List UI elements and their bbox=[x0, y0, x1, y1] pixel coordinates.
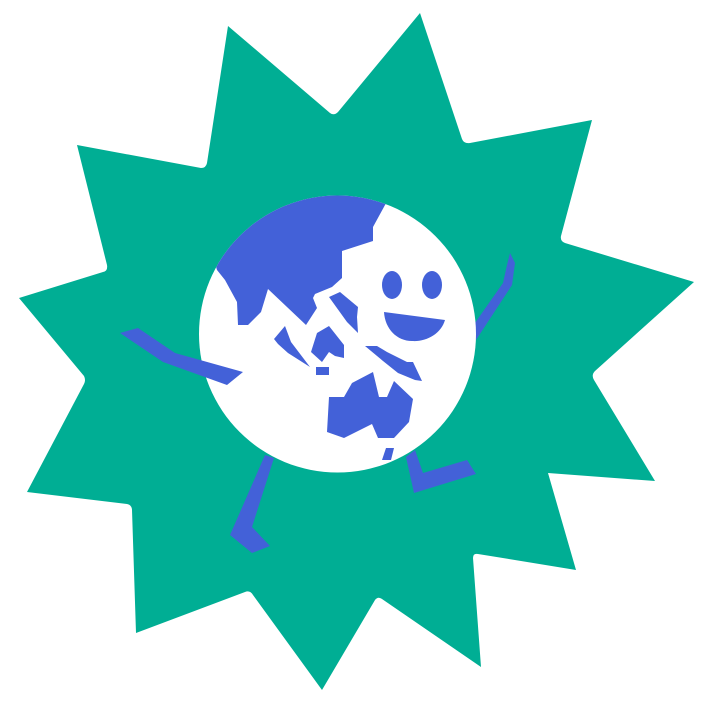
Asia bbox=[216, 196, 386, 325]
left leg bbox=[230, 455, 274, 553]
Philippines bbox=[274, 326, 310, 367]
right leg bbox=[406, 450, 476, 493]
right arm bbox=[470, 253, 515, 340]
mouth bbox=[384, 312, 445, 341]
small island bbox=[316, 367, 329, 375]
Borneo bbox=[311, 326, 344, 362]
left eye bbox=[382, 271, 402, 299]
face bbox=[382, 271, 445, 341]
continents bbox=[216, 196, 422, 460]
Tasmania bbox=[382, 448, 394, 460]
left arm bbox=[120, 328, 243, 385]
Australia bbox=[327, 372, 413, 438]
right eye bbox=[422, 271, 442, 299]
character: limbs behind globe bbox=[230, 253, 515, 553]
New Guinea bbox=[365, 346, 422, 381]
globe bbox=[199, 196, 476, 472]
Japan bbox=[329, 292, 358, 333]
